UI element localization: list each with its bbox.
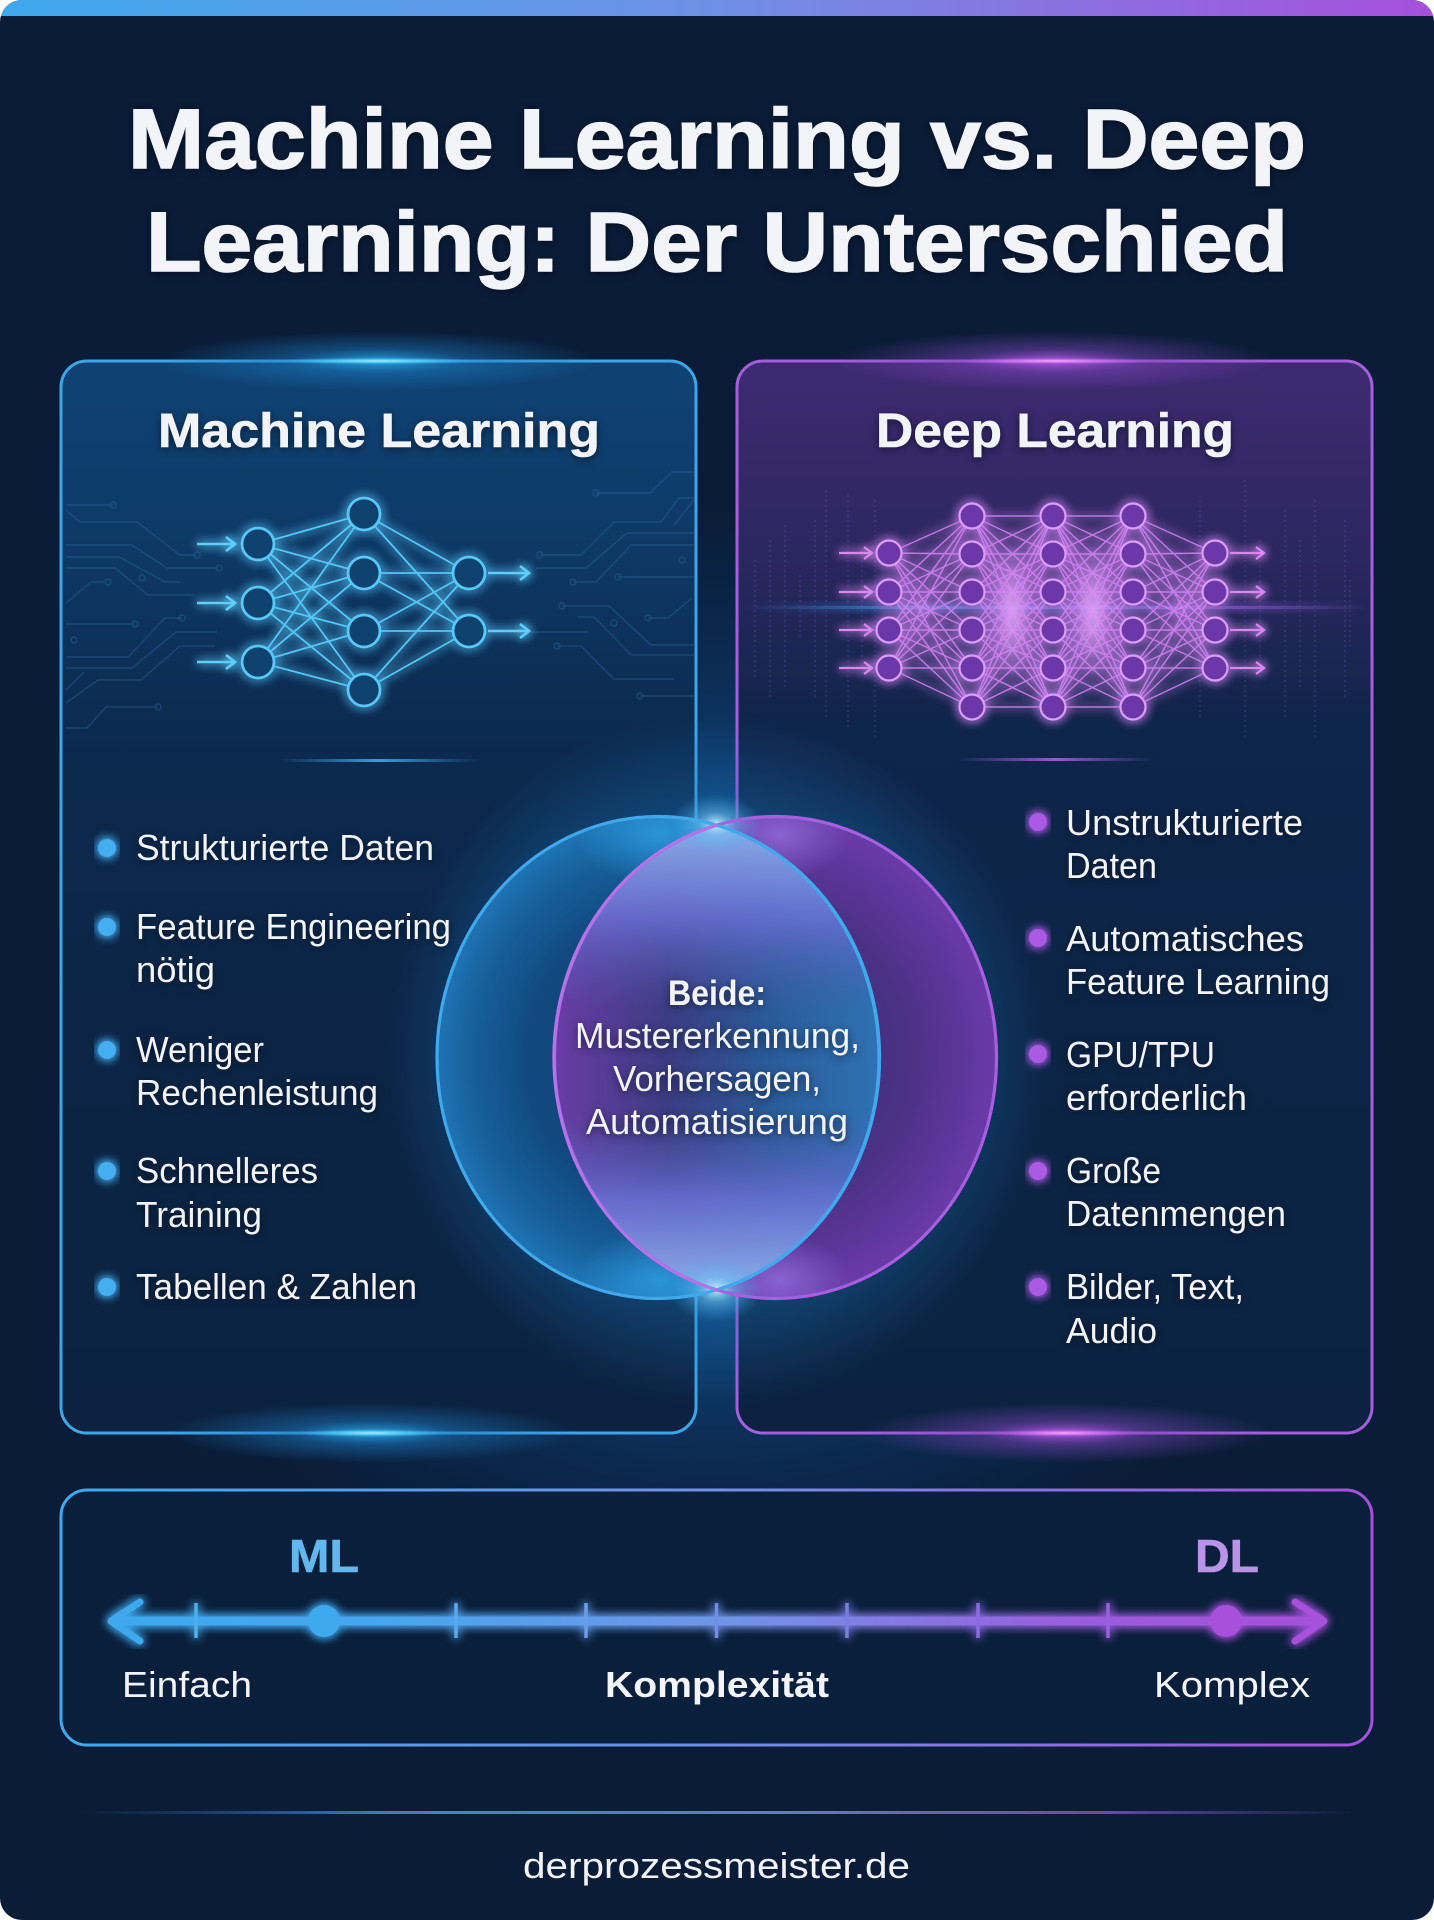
label: DL: DL (1195, 1530, 1259, 1582)
footer divider (75, 1811, 1358, 1814)
panel: Deep Learning (737, 331, 1372, 1463)
data stream background (755, 480, 1350, 740)
list: Deep Learning traits: Feature Learning (1066, 961, 1330, 1002)
panel: Machine Learning (61, 331, 696, 1463)
list: Machine Learning traits: Schnelleres (136, 1150, 318, 1191)
label: Einfach: Einfach (122, 1664, 252, 1705)
footer website: derprozessmeister.de (523, 1845, 910, 1886)
circuit traces left and right (66, 472, 694, 728)
list: Deep Learning traits: Daten (1066, 845, 1157, 886)
overlap text (575, 974, 860, 1142)
label: Komplexität: Komplexität (605, 1664, 829, 1705)
list: Machine Learning traits: Training (136, 1194, 262, 1235)
list: Deep Learning traits: GPU/TPU (1066, 1034, 1215, 1075)
complexity axis with arrows, ticks and markers (111, 1602, 1324, 1641)
title: Learning: Der Unterschied (146, 195, 1288, 289)
label: Komplex: Komplex (1154, 1664, 1310, 1705)
title (128, 92, 1306, 289)
list: Deep Learning traits: erforderlich (1066, 1077, 1247, 1118)
list: Deep Learning traits: Unstrukturierte (1066, 802, 1303, 843)
divider (280, 759, 478, 762)
list: Machine Learning traits: nötig (136, 949, 215, 990)
overlap text: Beide: (668, 974, 766, 1013)
list: Machine Learning traits: Strukturierte Daten (136, 827, 434, 868)
overlap text: Automatisierung (586, 1101, 848, 1142)
list: Machine Learning traits: Feature Engineering (136, 906, 451, 947)
overlap text: Mustererkennung, (575, 1015, 860, 1056)
neural network: simple (197, 498, 529, 706)
list: Deep Learning traits: Datenmengen (1066, 1193, 1286, 1234)
panel: complexity scale (61, 1490, 1372, 1745)
heading: Deep Learning: Deep Learning (876, 405, 1234, 458)
list: Machine Learning traits: Rechenleistung (136, 1072, 378, 1113)
venn backdrop glow (404, 732, 1029, 1388)
list: Deep Learning traits: Bilder, Text, (1066, 1266, 1244, 1307)
list: Machine Learning traits (98, 827, 451, 1307)
overlap text: Vorhersagen, (613, 1058, 821, 1099)
list: Deep Learning traits (1029, 802, 1330, 1351)
heading: Machine Learning: Machine Learning (158, 405, 600, 458)
list: Deep Learning traits: Große (1066, 1150, 1161, 1191)
list: Deep Learning traits: Automatisches (1066, 918, 1304, 959)
neural network: deep (839, 504, 1264, 720)
divider (956, 758, 1154, 761)
list: Machine Learning traits: Weniger (136, 1029, 264, 1070)
top gradient bar (0, 0, 1434, 16)
label: ML: ML (289, 1530, 359, 1582)
list: Deep Learning traits: Audio (1066, 1310, 1157, 1351)
venn diagram (437, 785, 996, 1330)
title: Machine Learning vs. Deep (128, 92, 1306, 186)
list: Machine Learning traits: Tabellen & Zahlen (136, 1266, 417, 1307)
